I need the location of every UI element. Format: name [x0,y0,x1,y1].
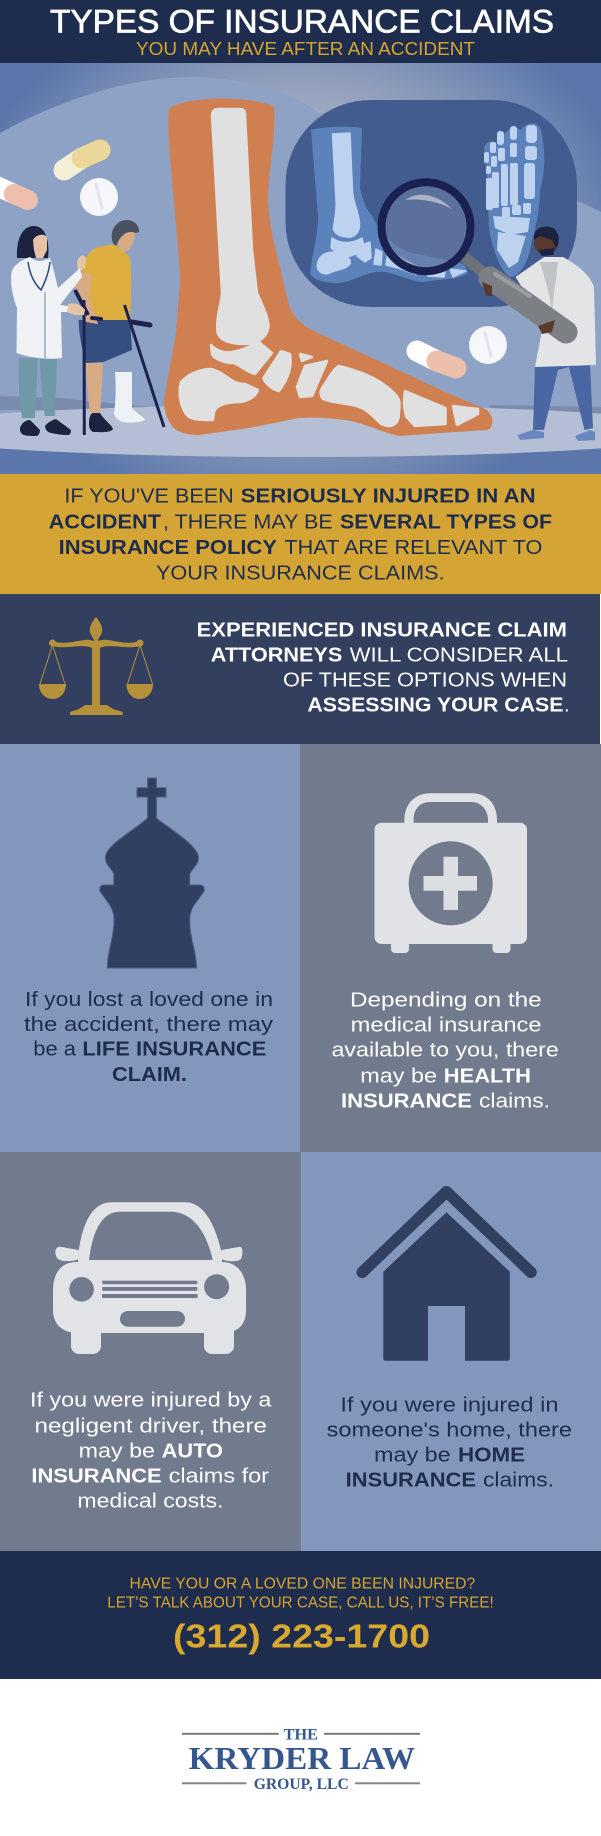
life insurance text [24,989,273,1086]
logo: The Kryder Law Group: KRYDER LAW [189,1740,415,1776]
attorneys text [197,620,570,717]
auto insurance text: may be [79,1441,155,1463]
panel: attorneys statement [0,594,600,744]
title: TYPES OF INSURANCE CLAIMS [50,4,554,40]
panel: health insurance [300,744,601,1152]
panel: intro statement: SERIOUSLY INJURED IN AN [241,486,536,508]
attorneys text: WILL CONSIDER ALL [350,645,568,667]
attorneys text: EXPERIENCED INSURANCE CLAIM [197,620,567,642]
auto insurance text: claims for [169,1466,269,1488]
attorneys text: OF THESE OPTIONS WHEN [283,670,567,692]
bones [180,109,478,426]
doctor: man with magnifying glass [516,226,596,441]
panel: intro statement: INSURANCE POLICY [59,537,278,559]
panel: life insurance [0,744,300,1152]
panel: intro statement: THAT ARE RELEVANT TO [284,537,542,559]
life insurance text: If you lost a loved one in [25,989,273,1011]
pill capsule: top left gold [64,150,100,170]
attorneys text: ATTORNEYS [211,645,342,667]
round tablet: left [80,178,118,216]
health insurance text: medical insurance [351,1015,542,1037]
magnifying glass [382,182,566,334]
life insurance text: be a [33,1039,77,1061]
life insurance text: CLAIM. [112,1064,187,1086]
header banner [0,0,601,63]
icon: car front [53,1202,246,1354]
doctor: woman with stethoscope [11,226,86,436]
orange ankle anatomy [164,98,492,436]
x-ray side view of foot [310,127,467,283]
health insurance text: claims. [479,1090,550,1112]
home insurance text: If you were injured in [340,1395,558,1417]
panel: call to action [0,1551,601,1679]
life insurance text: the accident, there may [24,1014,273,1036]
health insurance text: INSURANCE [341,1090,472,1112]
logo: The Kryder Law Group: THE [284,1726,318,1743]
panel: home insurance [301,1152,601,1551]
call to action text: HAVE YOU OR A LOVED ONE BEEN INJURED? [130,1575,475,1592]
home insurance text: HOME [458,1445,525,1467]
panel: intro statement [0,474,601,594]
pill capsule: left edge pink [0,184,28,200]
health insurance text: Depending on the [350,990,542,1012]
panel: intro statement: , THERE MAY BE [163,512,333,534]
panel: intro statement: IF YOU'VE BEEN [64,486,234,508]
pill capsule: right [417,351,456,368]
attorneys text: . [564,695,570,717]
home insurance text: someone's home, there [327,1420,572,1442]
auto insurance text: INSURANCE [31,1466,162,1488]
panel: intro statement: SEVERAL TYPES OF [340,512,552,534]
panel: call to action: LET’S TALK ABOUT YOUR CASE, CALL US, IT’S FREE! [107,1594,494,1611]
attorneys text: ASSESSING YOUR CASE [307,695,563,717]
auto insurance text [30,1390,272,1513]
home insurance text: claims. [483,1470,554,1492]
icon: house [362,1192,531,1361]
auto insurance text: If you were injured by a [30,1390,272,1412]
auto insurance text: AUTO [162,1441,223,1463]
subtitle: YOU MAY HAVE AFTER AN ACCIDENT [136,39,475,59]
auto insurance text: medical costs. [77,1491,224,1513]
x-ray top view of foot [484,123,544,277]
patient on crutches [75,220,164,435]
home insurance text [327,1395,572,1492]
round tablet: right [469,326,507,364]
icon: scales of justice [39,617,153,715]
panel: intro statement: ACCIDENT [49,512,161,534]
panel: auto insurance [0,1152,301,1551]
logo: The Kryder Law Group: GROUP, LLC [254,1776,349,1793]
panel: hero illustration [0,63,601,474]
health insurance text: may be [360,1066,437,1088]
panel: intro statement: YOUR INSURANCE CLAIMS. [156,562,445,584]
home insurance text: INSURANCE [346,1470,476,1492]
health insurance text: available to you, there [332,1040,559,1062]
health insurance text [332,990,559,1112]
home insurance text: may be [374,1445,451,1467]
phone number: (312) 223-1700 [173,1617,430,1654]
logo: The Kryder Law Group [182,1726,420,1793]
x-ray panel [286,100,577,307]
icon: medical kit [374,793,527,953]
life insurance text: LIFE INSURANCE [82,1039,266,1061]
health insurance text: HEALTH [444,1066,531,1088]
icon: gravestone with cross [100,778,204,968]
auto insurance text: negligent driver, there [34,1416,267,1438]
